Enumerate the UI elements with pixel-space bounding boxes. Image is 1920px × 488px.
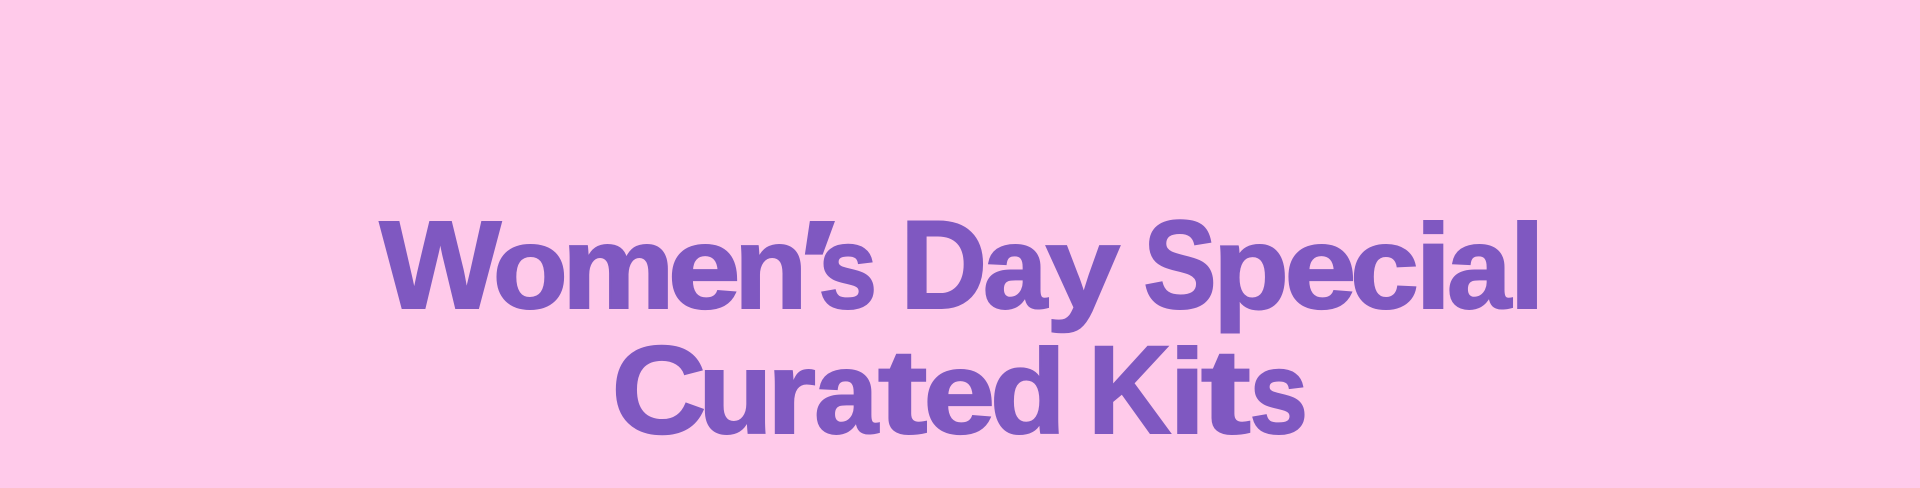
title line 1: a — [983, 202, 1048, 333]
title line 1: ′ — [800, 196, 836, 335]
title line 1: a — [1447, 202, 1512, 333]
title line 1: o — [493, 202, 568, 333]
title line 2: i — [1169, 325, 1206, 459]
title line 1: n — [734, 202, 807, 333]
title line 2: d — [990, 325, 1066, 459]
title line 1: y — [1046, 202, 1120, 333]
title — [380, 196, 1545, 460]
title line 2: s — [1250, 327, 1308, 458]
title line 1: l — [1509, 200, 1545, 334]
title line 1: m — [562, 202, 675, 333]
title line 1: e — [668, 202, 740, 333]
title line 2: C — [612, 321, 706, 460]
title line 2: e — [924, 327, 995, 458]
title line 2: t — [878, 325, 928, 459]
title line 1: S — [1143, 196, 1217, 335]
title line 1: e — [1284, 202, 1356, 333]
title line 1: D — [900, 196, 987, 335]
title line 2: r — [767, 327, 816, 458]
title line 2: t — [1201, 325, 1251, 459]
title line 1: W — [380, 196, 501, 335]
title line 1: s — [818, 202, 877, 333]
title line 1: p — [1213, 202, 1289, 333]
title line 1: i — [1415, 200, 1452, 334]
title line 2: K — [1088, 321, 1171, 460]
title line 1: c — [1350, 202, 1419, 333]
title line 2: a — [814, 327, 879, 458]
title line 2: u — [698, 327, 772, 458]
